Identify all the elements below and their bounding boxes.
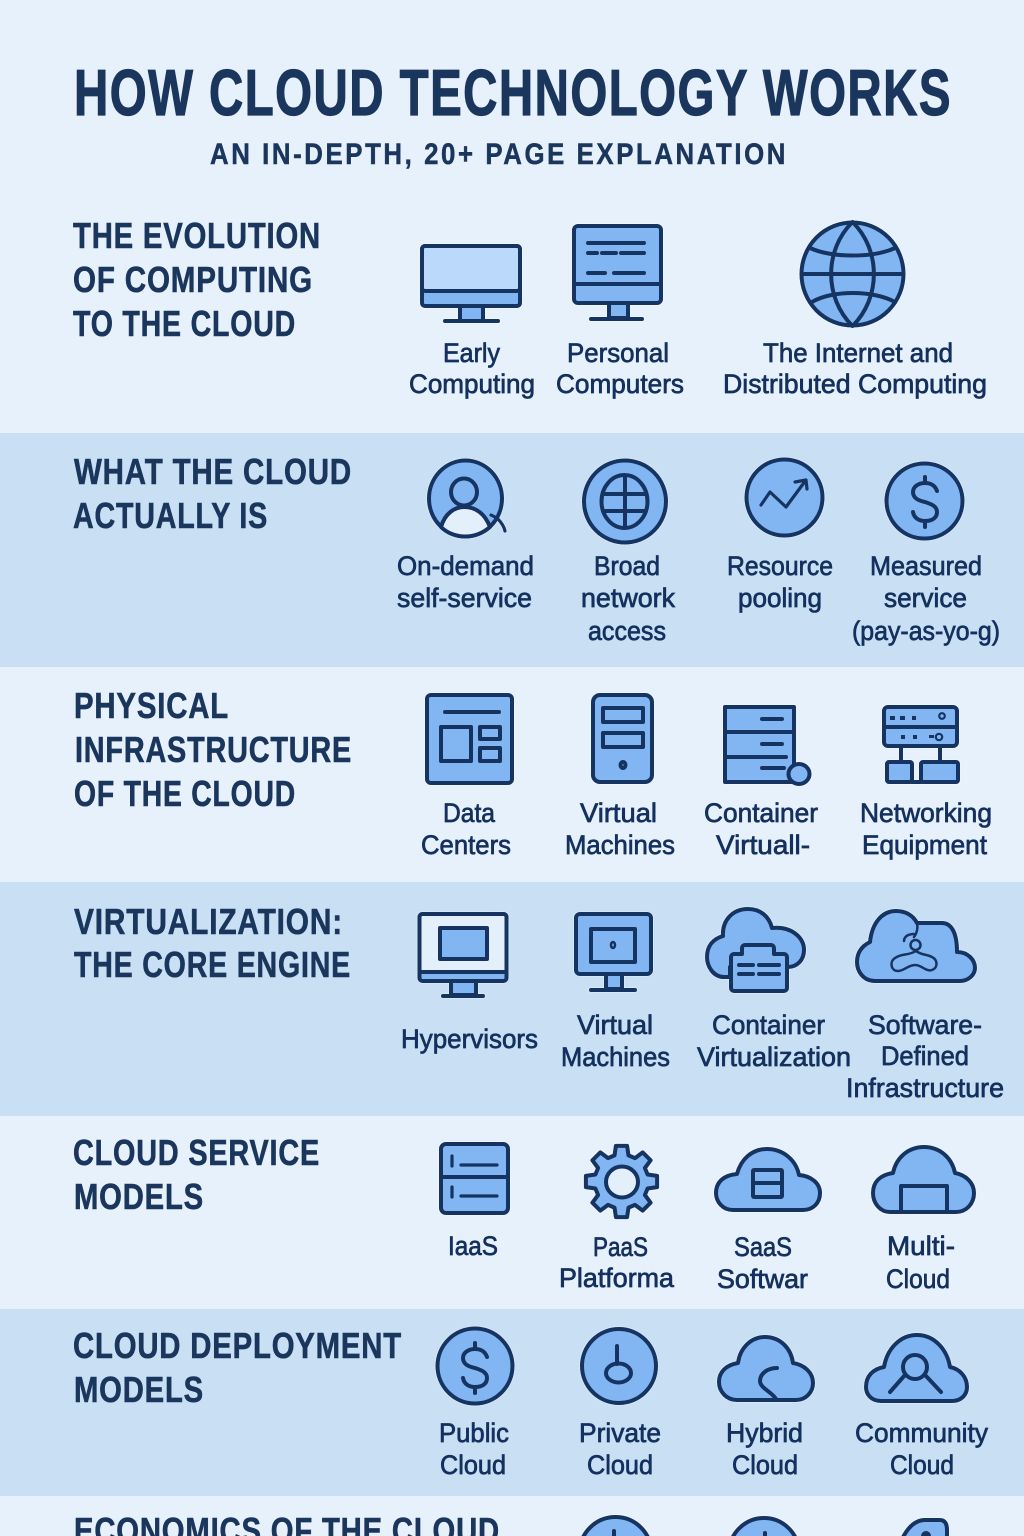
item: iaas: IaaS xyxy=(448,1231,498,1261)
item: community cloud xyxy=(855,1335,989,1480)
icon: hybrid cloud xyxy=(719,1337,813,1400)
icon: cloud with doorway xyxy=(873,1147,974,1212)
item: private cloud xyxy=(579,1329,661,1480)
icon: network switch xyxy=(884,707,958,782)
item: public cloud: Cloud xyxy=(440,1450,506,1480)
item: saas softwar: Softwar xyxy=(717,1264,808,1294)
item: personal computers: Computers xyxy=(556,369,684,399)
icon: tag shape xyxy=(895,1520,947,1536)
heading: evolution xyxy=(73,215,321,344)
item: container virtualization: Virtuall- xyxy=(716,830,810,860)
item: measured service xyxy=(852,464,1000,646)
icon: network globe xyxy=(584,460,666,542)
icon: dollar in circle xyxy=(886,464,962,538)
item: multi-cloud xyxy=(873,1147,974,1294)
item: virtual machines: Virtual xyxy=(580,798,657,828)
icon: community cloud xyxy=(866,1335,967,1401)
item: paas platforma xyxy=(559,1146,674,1293)
heading: what the cloud is xyxy=(73,451,352,536)
heading: physical infrastructure xyxy=(74,685,352,814)
item: internet and distributed computing: The Internet and xyxy=(763,338,953,368)
item: hypervisors: Hypervisors xyxy=(401,1024,538,1054)
item: broad network access: access xyxy=(588,616,666,646)
icon: desktop monitor xyxy=(422,246,520,321)
item: container virtualization xyxy=(697,909,851,1072)
item: networking equipment: Equipment xyxy=(862,830,988,860)
item: early computing: Computing xyxy=(409,369,535,399)
item: resource pooling xyxy=(727,460,833,613)
item: software-defined infrastructure: Defined xyxy=(881,1041,969,1071)
item: on-demand self-service xyxy=(397,460,534,613)
item: broad network access: Broad xyxy=(594,551,660,581)
icon: hypervisor monitor xyxy=(420,914,506,996)
icon: trend arrow in circle xyxy=(746,460,822,536)
item: internet and distributed computing xyxy=(723,222,987,399)
item: measured service: Measured xyxy=(870,551,982,581)
item: saas softwar xyxy=(716,1149,820,1294)
panel: physical infrastructure xyxy=(0,667,1024,882)
icon: keyhole circle xyxy=(582,1329,656,1403)
heading: service models: MODELS xyxy=(74,1176,204,1217)
item: software-defined infrastructure: Software- xyxy=(868,1010,982,1040)
heading: service models: CLOUD SERVICE xyxy=(73,1132,320,1173)
item: data centers: Data xyxy=(443,798,495,828)
heading: service models xyxy=(73,1132,320,1217)
heading: what the cloud is: WHAT THE CLOUD xyxy=(74,451,352,492)
item: resource pooling: pooling xyxy=(738,583,822,613)
panel: cloud deployment models xyxy=(0,1309,1024,1496)
item: saas softwar: SaaS xyxy=(734,1232,792,1262)
heading: physical infrastructure: OF THE CLOUD xyxy=(74,773,296,814)
item: private cloud: Private xyxy=(579,1418,661,1448)
icon: gear xyxy=(586,1146,657,1217)
item: public cloud xyxy=(438,1328,512,1480)
heading: deployment models: MODELS xyxy=(74,1369,204,1410)
item: broad network access xyxy=(581,460,676,646)
item: virtual machines: Machines xyxy=(565,830,675,860)
heading: virtualization: THE CORE ENGINE xyxy=(74,944,351,985)
heading: evolution: OF COMPUTING xyxy=(73,259,313,300)
item: container virtualization: Virtualization xyxy=(697,1042,851,1072)
icon: clock circle one xyxy=(580,1517,652,1536)
icon: user in circle xyxy=(429,460,505,536)
item: virtual machines: Virtual xyxy=(577,1010,653,1040)
item: hybrid cloud: Cloud xyxy=(732,1450,798,1480)
item: data centers xyxy=(421,695,512,860)
subtitle: AN IN-DEPTH, 20+ PAGE EXPLANATION xyxy=(210,138,788,171)
page header panel xyxy=(0,0,1024,210)
panel: cloud service models xyxy=(0,1116,1024,1309)
icon: computer with text lines xyxy=(574,226,661,319)
item: resource pooling: Resource xyxy=(727,551,833,581)
icon: server tower xyxy=(593,695,652,782)
item: multi-cloud: Cloud xyxy=(886,1264,950,1294)
item: personal computers: Personal xyxy=(567,338,669,368)
icon: container stack xyxy=(725,707,810,784)
heading: evolution: THE EVOLUTION xyxy=(73,215,321,256)
panel: the evolution of computing xyxy=(0,210,1024,433)
icon: cloud with node symbol xyxy=(857,911,975,981)
heading: physical infrastructure: INFRASTRUCTURE xyxy=(75,729,352,770)
item: virtual machines: Machines xyxy=(561,1042,670,1072)
heading: virtualization: VIRTUALIZATION: xyxy=(74,901,343,942)
item: networking equipment: Networking xyxy=(860,798,992,828)
panel: virtualization core engine xyxy=(0,882,1024,1116)
icon: cloud with container xyxy=(707,909,804,991)
item: hybrid cloud xyxy=(719,1337,813,1480)
icon: server rack xyxy=(441,1144,508,1213)
item: multi-cloud: Multi- xyxy=(887,1231,955,1261)
item: paas platforma: PaaS xyxy=(593,1232,648,1262)
icon: globe xyxy=(802,222,904,326)
icon: virtual machine monitor xyxy=(576,914,651,990)
item: container virtualization: Container xyxy=(712,1010,825,1040)
heading: physical infrastructure: PHYSICAL xyxy=(74,685,229,726)
item: private cloud: Cloud xyxy=(587,1450,653,1480)
item: early computing: Early xyxy=(443,338,501,368)
icon: cloud with grid box xyxy=(716,1149,820,1210)
item: networking equipment xyxy=(860,707,992,860)
item: on-demand self-service: On-demand xyxy=(397,551,534,581)
item: software-defined infrastructure xyxy=(846,911,1004,1103)
item: on-demand self-service: self-service xyxy=(397,583,532,613)
item: public cloud: Public xyxy=(439,1418,509,1448)
item: personal computers xyxy=(556,226,684,399)
heading: what the cloud is: ACTUALLY IS xyxy=(73,495,268,536)
item: paas platforma: Platforma xyxy=(559,1263,674,1293)
item: data centers: Centers xyxy=(421,830,511,860)
item: community cloud: Cloud xyxy=(890,1450,954,1480)
panel: economics of the cloud xyxy=(0,1496,1024,1536)
item: hypervisors xyxy=(401,914,538,1054)
heading: virtualization xyxy=(74,901,351,985)
icon: data center panel xyxy=(427,695,512,783)
heading: evolution: TO THE CLOUD xyxy=(73,303,296,344)
item: software-defined infrastructure: Infrastructure xyxy=(846,1073,1004,1103)
icon: clock circle two xyxy=(729,1518,799,1536)
heading: deployment models: CLOUD DEPLOYMENT xyxy=(73,1325,402,1366)
panel: what the cloud actually is xyxy=(0,433,1024,667)
item: hybrid cloud: Hybrid xyxy=(726,1418,803,1448)
item: virtual machines xyxy=(565,695,675,860)
item: broad network access: network xyxy=(581,583,676,613)
item: container virtualization: Container xyxy=(704,798,818,828)
item: internet and distributed computing: Distributed Computing xyxy=(723,369,987,399)
icon: dollar coin xyxy=(438,1328,512,1404)
item: measured service: service xyxy=(884,583,967,613)
item: early computing xyxy=(409,246,535,399)
item: measured service: (pay-as-yo-g) xyxy=(852,616,1000,646)
item: community cloud: Community xyxy=(855,1418,989,1448)
item: virtual machines xyxy=(561,914,670,1072)
item: container virtualization xyxy=(704,707,818,860)
heading: deployment models xyxy=(73,1325,402,1410)
item: iaas xyxy=(441,1144,508,1261)
